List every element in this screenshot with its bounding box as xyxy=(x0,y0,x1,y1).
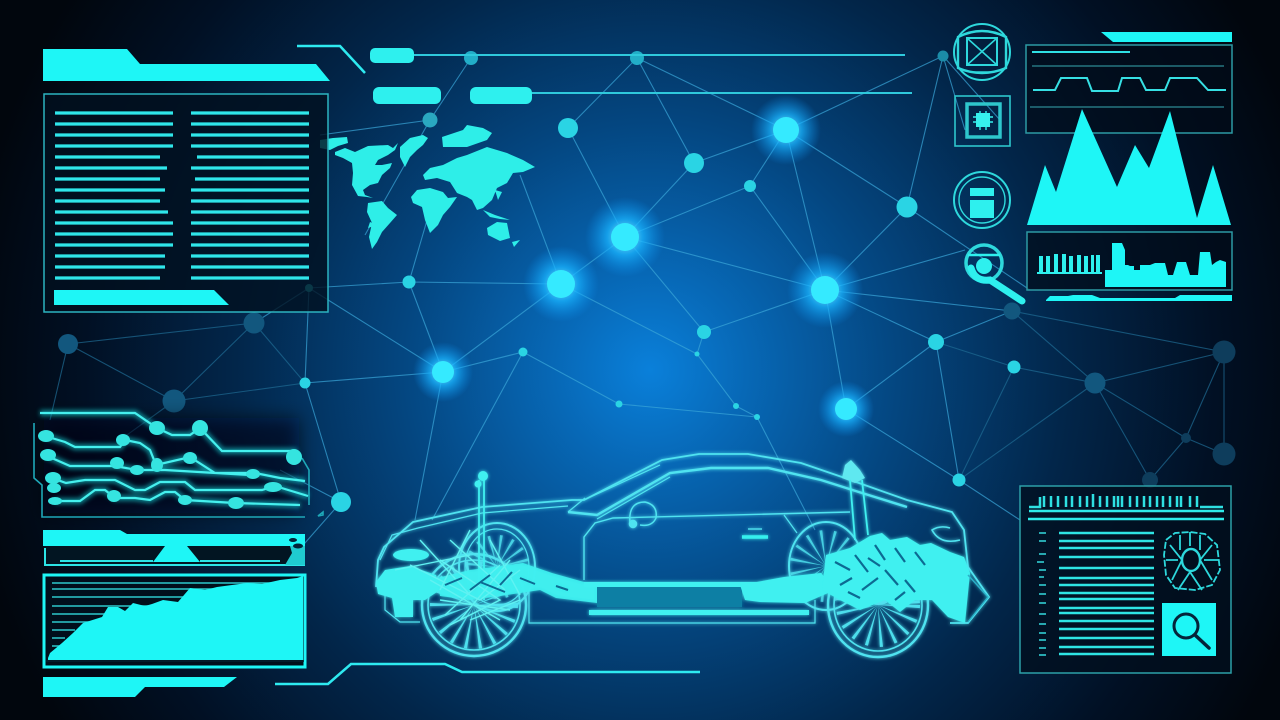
header tab xyxy=(43,49,330,81)
suspension struts xyxy=(474,460,868,600)
front chassis texture xyxy=(445,572,568,592)
frame lines xyxy=(45,548,305,565)
trace glow xyxy=(40,413,308,505)
frame xyxy=(1026,45,1232,133)
frame xyxy=(1027,232,1232,290)
barcode header xyxy=(1029,494,1223,507)
corner accent xyxy=(297,46,365,73)
rear bumper xyxy=(968,575,988,622)
far rear wheel xyxy=(789,522,863,610)
bright glowing nodes xyxy=(413,95,874,437)
rear engine texture xyxy=(835,545,925,600)
lower pills and line xyxy=(373,87,441,104)
panel: right bar chart xyxy=(1027,232,1232,301)
panel: left bracket gauge xyxy=(43,530,305,566)
panel: top-right waveform xyxy=(1026,32,1232,133)
Eurasia xyxy=(423,147,535,210)
header rules xyxy=(1028,511,1224,519)
filled area xyxy=(48,576,303,660)
dim outer network lines xyxy=(50,311,1224,480)
front wiring scribbles xyxy=(395,530,520,625)
icon: database xyxy=(954,172,1010,228)
lines xyxy=(1032,51,1130,53)
area chart: lower left xyxy=(44,575,305,667)
text lines xyxy=(55,113,309,278)
bottom centre connector xyxy=(275,664,700,684)
bottom-left bar xyxy=(43,677,237,697)
grid lines xyxy=(52,583,300,646)
Africa xyxy=(411,188,457,233)
backdrop xyxy=(1027,232,1232,290)
top centre bars xyxy=(370,48,912,104)
far front wheel xyxy=(459,523,535,611)
Australia xyxy=(487,222,510,241)
Arctic islands xyxy=(320,137,348,150)
Greenland xyxy=(400,135,428,167)
top solid bar with stem xyxy=(43,530,305,562)
North America xyxy=(335,143,398,198)
small bars xyxy=(1037,254,1102,274)
panel: top-left text block xyxy=(43,46,365,312)
front chassis and components xyxy=(376,549,597,617)
world map xyxy=(320,125,535,249)
Siberia xyxy=(442,125,492,147)
icon: magnifier with wrench xyxy=(966,245,1022,301)
islands xyxy=(368,190,520,247)
row labels xyxy=(1037,533,1046,655)
waveform xyxy=(1033,78,1226,91)
trace nodes xyxy=(38,420,302,509)
backdrop xyxy=(44,546,305,566)
frame xyxy=(1020,486,1231,673)
medium nodes xyxy=(300,50,1020,512)
footer bar xyxy=(54,290,229,305)
solid histogram xyxy=(1105,243,1226,287)
icon: magnifier box xyxy=(1162,603,1216,656)
near rear wheel xyxy=(828,553,928,657)
panel: bottom-right data sheet xyxy=(1020,486,1231,673)
upper pill and line xyxy=(370,48,414,63)
dim nodes xyxy=(58,302,1236,488)
South America xyxy=(367,201,397,249)
wireframe car xyxy=(376,454,989,657)
icon: chip xyxy=(955,96,1010,146)
backdrop xyxy=(1026,45,1232,133)
frame xyxy=(44,575,305,667)
panel: circuit traces xyxy=(34,413,323,517)
baseline strip xyxy=(1046,295,1232,301)
network connection lines xyxy=(254,56,1030,560)
network nodes xyxy=(58,50,1236,512)
icon: organic gear xyxy=(1164,532,1220,590)
mountain chart xyxy=(1027,109,1231,225)
frame xyxy=(44,94,328,312)
top tab xyxy=(1101,32,1232,42)
wheels xyxy=(422,522,928,657)
icon stack: right xyxy=(954,24,1022,301)
sill and battery xyxy=(584,573,835,615)
rows of data lines xyxy=(1059,533,1154,654)
near front wheel xyxy=(422,554,526,656)
lower strip xyxy=(46,660,304,662)
backdrop xyxy=(44,418,299,513)
rear engine mass xyxy=(822,533,970,623)
icon: monitor with cross xyxy=(954,24,1010,80)
trace lines xyxy=(40,413,308,505)
car body outline xyxy=(376,454,989,623)
door mirror and handle xyxy=(630,502,768,537)
frame xyxy=(34,423,323,517)
right side marks xyxy=(285,538,305,565)
